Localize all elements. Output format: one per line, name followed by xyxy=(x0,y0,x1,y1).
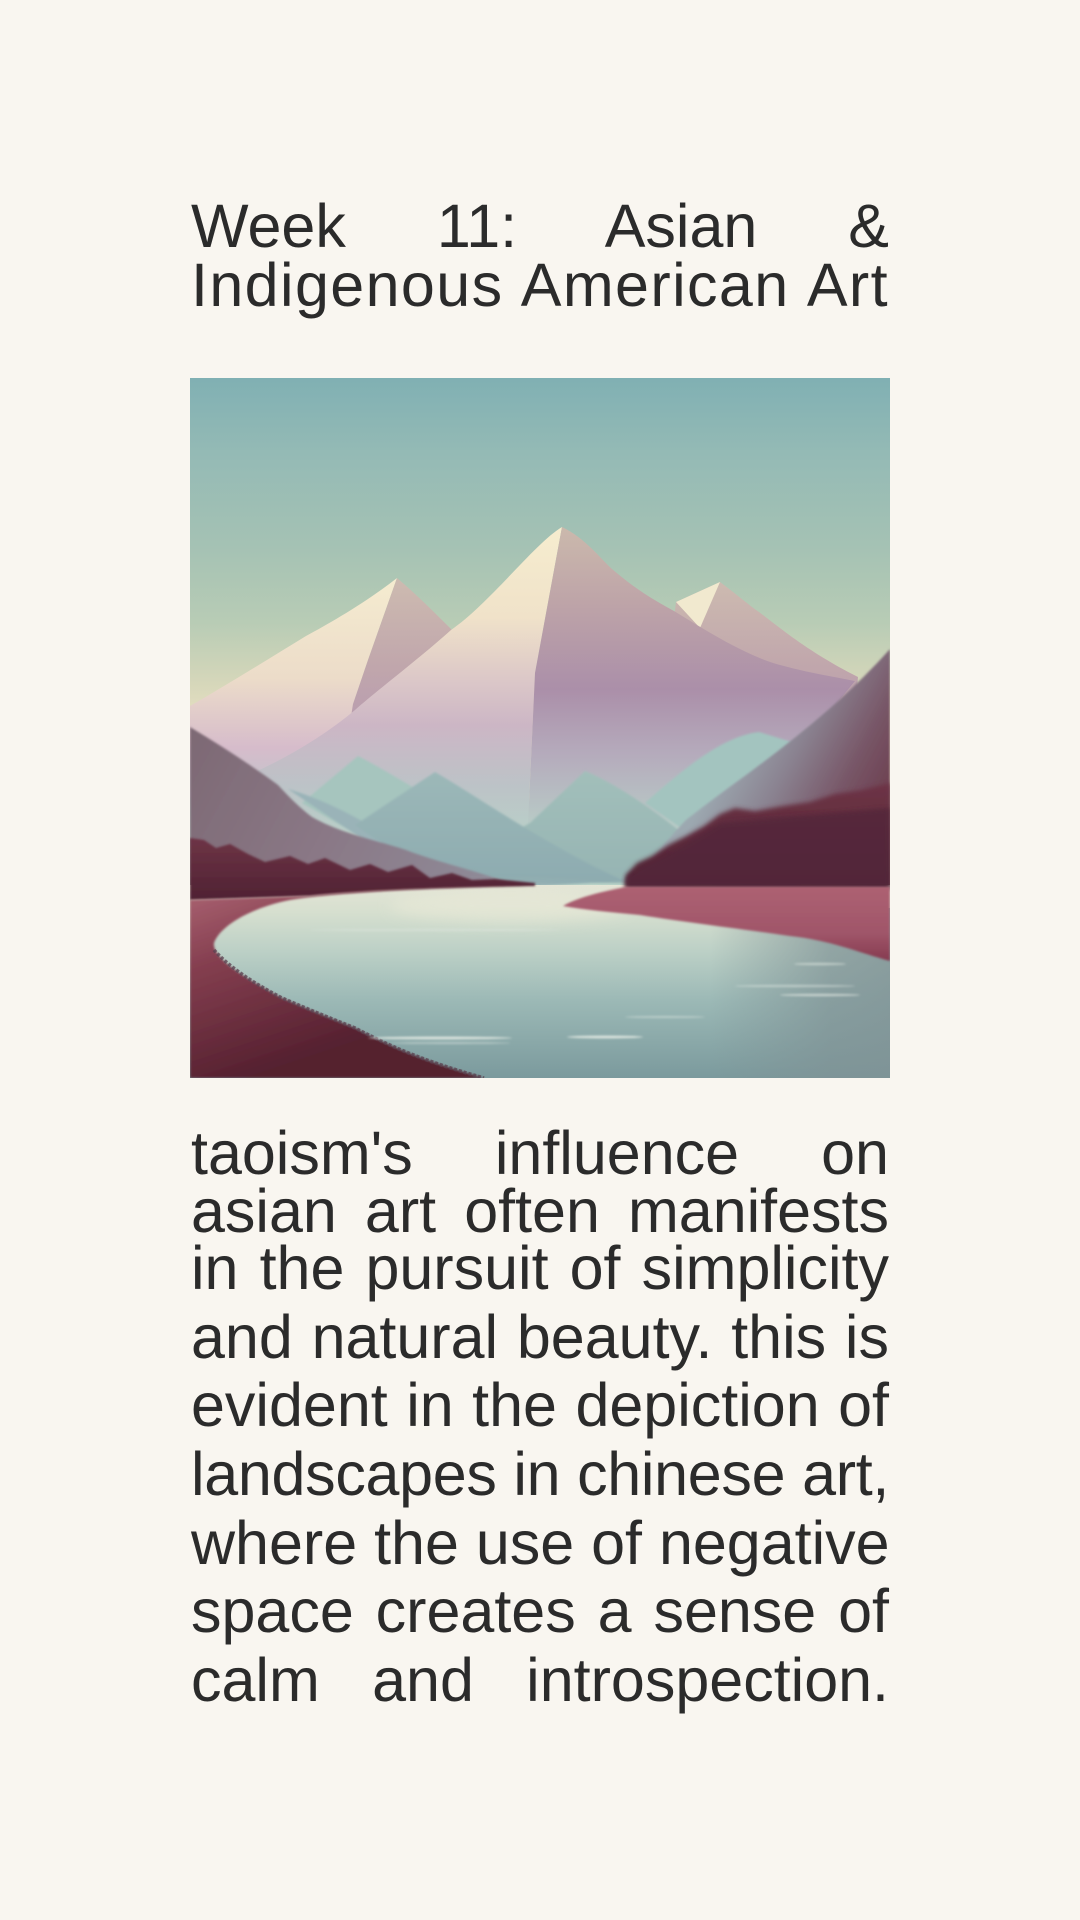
body text: and natural beauty. this is xyxy=(191,1303,889,1371)
body text xyxy=(190,1119,890,1714)
illustration: mountain landscape with river xyxy=(190,378,890,1078)
body text: in the pursuit of simplicity xyxy=(191,1234,889,1302)
main peak xyxy=(190,527,855,893)
body text: taoism's influence on xyxy=(191,1119,889,1187)
title xyxy=(191,192,889,319)
title: Week 11: Asian & xyxy=(191,192,889,260)
right river bank xyxy=(563,887,890,961)
river xyxy=(190,885,890,1078)
body text: calm and introspection. xyxy=(191,1646,889,1714)
body text: where the use of negative xyxy=(191,1509,890,1577)
body text: landscapes in chinese art, xyxy=(191,1440,889,1508)
right dark mountain xyxy=(625,649,890,893)
left river bank xyxy=(190,885,535,1078)
left tree line xyxy=(190,838,535,900)
sky xyxy=(190,378,890,1078)
right tree line xyxy=(625,783,890,888)
body text: asian art often manifests xyxy=(191,1177,889,1245)
body text: evident in the depiction of xyxy=(191,1371,889,1439)
distant teal mountains xyxy=(288,732,795,886)
body text: space creates a sense of xyxy=(191,1577,889,1645)
left dark mountain xyxy=(190,727,515,908)
left peak xyxy=(190,578,455,818)
title: Indigenous American Art xyxy=(191,251,889,319)
water glints xyxy=(310,929,860,1044)
right peak xyxy=(660,582,858,738)
